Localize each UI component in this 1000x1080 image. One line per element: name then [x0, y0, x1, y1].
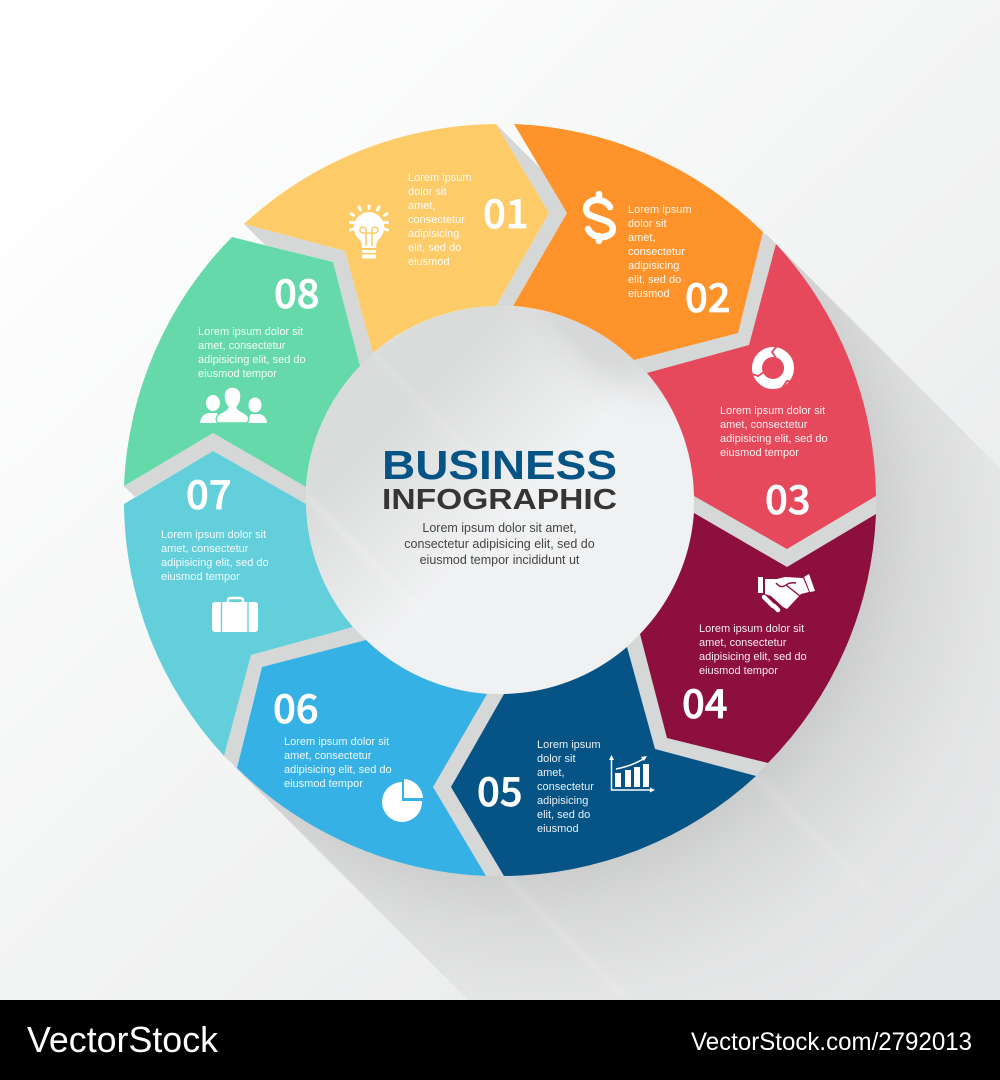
title: BUSINESS [382, 442, 617, 488]
title: INFOGRAPHIC [382, 484, 617, 516]
text: segment 02 body: amet, [628, 232, 656, 244]
central disc [306, 290, 694, 694]
icon: light bulb [350, 206, 388, 258]
icon: handshake [758, 574, 815, 610]
icon: dollar sign [586, 194, 613, 241]
panel: segment 06 [237, 640, 487, 876]
text: segment 01 body: adipisicing [408, 228, 459, 240]
footer bar [0, 1000, 1000, 1080]
text: segment 03 body: eiusmod tempor [720, 447, 799, 459]
center description: eiusmod tempor incididunt ut [420, 553, 580, 567]
icon: briefcase [212, 598, 258, 632]
text: segment 07 body: amet, consectetur [161, 543, 249, 555]
panel: segment 08 [124, 237, 360, 487]
text: segment 04 body: Lorem ipsum dolor sit [699, 623, 804, 635]
gaps between segments [124, 124, 876, 876]
text: segment 05 body: dolor sit [537, 753, 576, 765]
text: segment 02 body: eiusmod [628, 288, 670, 300]
icon: people [200, 387, 267, 423]
text: segment 05 body: elit, sed do [537, 809, 590, 821]
panel: segment 01 [244, 124, 549, 353]
text: segment 01 body: consectetur [408, 214, 465, 226]
text: segment 07 body: adipisicing elit, sed do [161, 557, 269, 569]
text: segment 04 body: eiusmod tempor [699, 665, 778, 677]
title [382, 442, 617, 516]
text: segment 05 body: adipisicing [537, 795, 588, 807]
text: segment 01 body: elit, sed do [408, 242, 461, 254]
text: segment 03 body: amet, consectetur [720, 419, 808, 431]
text: segment 08 body: eiusmod tempor [198, 368, 277, 380]
footer url: VectorStock.com/2792013 [691, 1028, 972, 1056]
center description: consectetur adipisicing elit, sed do [404, 537, 595, 551]
panel: segment 02 [513, 124, 763, 360]
panel: segment 05 [451, 647, 756, 876]
number 06: 06 [273, 677, 319, 735]
text: segment 02 body: dolor sit [628, 218, 667, 230]
text: segment 06 body: adipisicing elit, sed do [284, 764, 392, 776]
text: segment 07 body: eiusmod tempor [161, 571, 240, 583]
text: segment 01 body: eiusmod [408, 256, 450, 268]
text: segment 06 body: amet, consectetur [284, 750, 372, 762]
footer logo: VectorStock [27, 1019, 219, 1060]
text: segment 02 body: adipisicing [628, 260, 679, 272]
number 05: 05 [477, 760, 523, 818]
text: segment 01 body: Lorem ipsum [408, 172, 472, 184]
icon: bar chart [609, 755, 655, 792]
text: segment 02 body: consectetur [628, 246, 685, 258]
number 03: 03 [765, 468, 811, 526]
text: segment 06 body: Lorem ipsum dolor sit [284, 736, 389, 748]
long drop shadow [234, 234, 1000, 1000]
text: segment 05 body: eiusmod [537, 823, 579, 835]
center description: Lorem ipsum dolor sit amet, [422, 521, 577, 535]
text: segment 05 body: consectetur [537, 781, 594, 793]
text: segment 08 body: amet, consectetur [198, 340, 286, 352]
panel: segment 07 [124, 451, 353, 756]
text: segment 03 body: Lorem ipsum dolor sit [720, 405, 825, 417]
text: segment 05 body: Lorem ipsum [537, 739, 601, 751]
number 02: 02 [685, 266, 731, 324]
panel: segment 03 [647, 244, 876, 549]
number 08: 08 [274, 262, 320, 320]
panel: segment 04 [640, 513, 876, 763]
text: segment 04 body: adipisicing elit, sed do [699, 651, 807, 663]
number 07: 07 [186, 463, 232, 521]
text: segment 01 body: dolor sit [408, 186, 447, 198]
number 01: 01 [483, 182, 529, 240]
text: segment 02 body: elit, sed do [628, 274, 681, 286]
icon: circular arrows [752, 346, 796, 388]
text: segment 08 body: adipisicing elit, sed do [198, 354, 306, 366]
text: segment 01 body: amet, [408, 200, 436, 212]
text: segment 03 body: adipisicing elit, sed do [720, 433, 828, 445]
text: segment 06 body: eiusmod tempor [284, 778, 363, 790]
text: segment 07 body: Lorem ipsum dolor sit [161, 529, 266, 541]
text: segment 08 body: Lorem ipsum dolor sit [198, 326, 303, 338]
text: segment 02 body: Lorem ipsum [628, 204, 692, 216]
text: segment 04 body: amet, consectetur [699, 637, 787, 649]
number 04: 04 [682, 672, 728, 730]
text: segment 05 body: amet, [537, 767, 565, 779]
icon: pie chart [382, 779, 423, 822]
